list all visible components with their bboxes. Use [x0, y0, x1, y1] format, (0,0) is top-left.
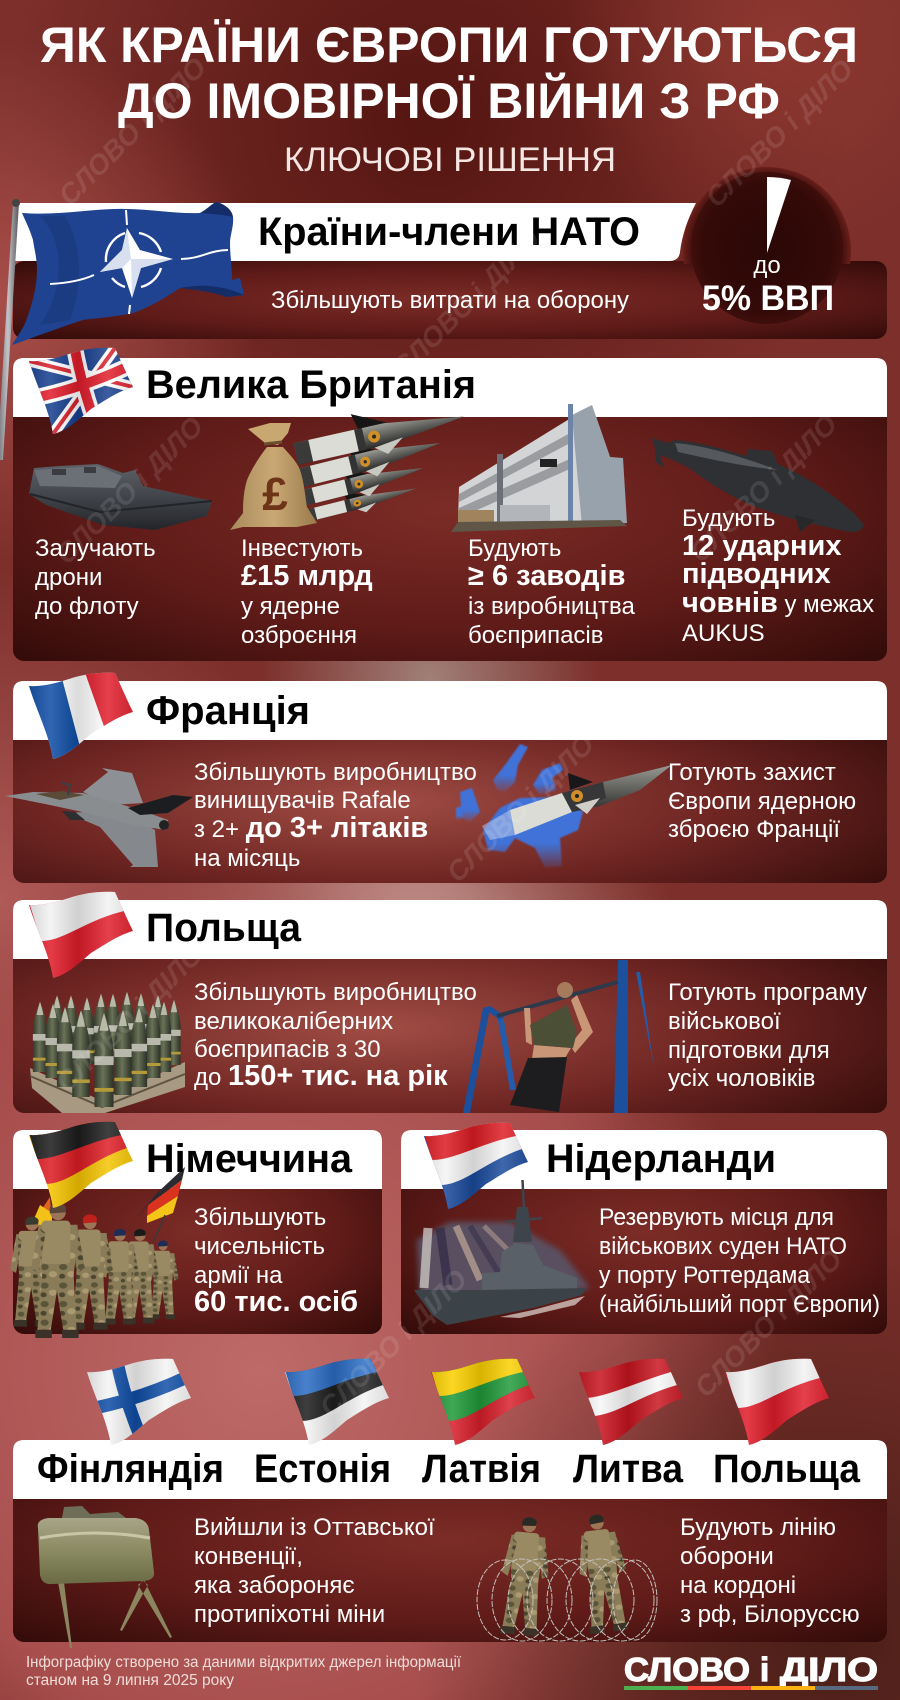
panel: Baltic and eastern states — [13, 1440, 887, 1642]
text: Rafale production: на місяць — [194, 845, 300, 872]
icon: soldiers with barbed wire — [477, 1512, 657, 1641]
icon: Netherlands flag — [424, 1122, 528, 1209]
source note: Інфографіку створено за даними відкритих джерел інформації — [26, 1654, 462, 1671]
watermarks: СЛОВО і ДІЛО — [699, 53, 859, 213]
text: investment: Інвестують — [241, 535, 363, 562]
panel: NATO — [13, 203, 887, 339]
icon: Rafale fighter — [5, 768, 193, 867]
watermarks: СЛОВО і ДІЛО — [440, 728, 600, 888]
icon: Estonia flag — [285, 1358, 389, 1445]
text: ammunition production: до 150+ тис. на рік — [194, 1060, 448, 1092]
watermarks: СЛОВО і ДІЛО — [688, 1243, 848, 1403]
icon: naval drone — [29, 464, 212, 530]
icon: Finland flag — [87, 1358, 191, 1445]
watermarks: СЛОВО і ДІЛО — [683, 408, 843, 568]
text: Rafale production: з 2+ до 3+ літаків — [194, 812, 428, 844]
heading bar: Poland — [13, 900, 887, 959]
text: submarines: AUKUS — [682, 620, 765, 647]
watermarks: СЛОВО і ДІЛО — [52, 51, 212, 211]
text: defence line — [680, 1514, 860, 1628]
text: factories — [468, 535, 635, 649]
text: investment: у ядерне — [241, 593, 340, 620]
icon: money bag: £ — [262, 468, 288, 520]
text: ammunition production: боєприпасів з 30 — [194, 1036, 381, 1063]
text: ammunition production: великокаліберних — [194, 1008, 393, 1035]
icon: anti-personnel mine — [38, 1506, 172, 1648]
text: army size: армії на — [194, 1262, 283, 1289]
text: port reservation: (найбільший порт Європи) — [599, 1291, 880, 1318]
text: military training — [668, 979, 867, 1092]
heading bar: NATO — [13, 203, 696, 261]
heading: country names: Фінляндія — [37, 1447, 224, 1491]
watermarks: СЛОВО і ДІЛО — [49, 410, 209, 570]
text: military training: військової — [668, 1008, 781, 1035]
icon: Germany flag — [29, 1122, 133, 1208]
text: port reservation: Резервують місця для — [599, 1204, 834, 1231]
subtitle: КЛЮЧОВІ РІШЕННЯ — [284, 141, 616, 179]
text: Rafale production — [194, 759, 477, 872]
panel: Germany — [13, 1130, 382, 1334]
text: Ottawa convention: конвенції, — [194, 1543, 303, 1570]
icon: ammunition factory — [451, 404, 627, 532]
watermarks: СЛОВО і ДІЛО — [49, 938, 209, 1098]
icon: nuclear missile — [482, 765, 672, 840]
heading: country names — [37, 1447, 861, 1491]
text: ammunition production: Збільшують виробництво — [194, 979, 477, 1006]
text: nuclear protection: зброєю Франції — [668, 816, 840, 843]
logo: і — [760, 1651, 769, 1688]
icon: Poland flag small — [725, 1358, 829, 1445]
text: ammunition production — [194, 979, 477, 1092]
text: defence line: оборони — [680, 1543, 774, 1570]
icon: Poland flag — [29, 892, 133, 978]
text: defence line: з рф, Білоруссю — [680, 1601, 860, 1628]
heading: Germany: Німеччина — [146, 1137, 353, 1181]
text: factories: ≥ 6 заводів — [468, 560, 625, 592]
text: Ottawa convention — [194, 1514, 435, 1628]
text: nuclear protection: Європи ядерною — [668, 788, 856, 815]
logo: СЛОВО — [624, 1651, 750, 1688]
text: military training: підготовки для — [668, 1037, 830, 1064]
text: submarines: підводних — [682, 558, 831, 590]
text: nuclear protection — [668, 759, 856, 843]
watermarks — [49, 51, 859, 1423]
icon: warship in port — [414, 1180, 590, 1325]
icon: map of Europe — [456, 744, 583, 868]
heading: Netherlands: Нідерланди — [546, 1137, 776, 1181]
text: investment — [241, 535, 373, 649]
text: defence line: Будують лінію — [680, 1514, 836, 1541]
text: Ottawa convention: Вийшли із Оттавської — [194, 1514, 435, 1541]
source note: станом на 9 липня 2025 року — [26, 1672, 234, 1689]
icon: man on pull-up bar — [463, 960, 654, 1113]
heading: Poland: Польща — [146, 906, 302, 950]
text: factories: із виробництва — [468, 593, 635, 620]
text: Rafale production: винищувачів Rafale — [194, 787, 411, 814]
chart: 5% of GDP dial: 5% ВВП — [702, 279, 834, 318]
text: investment: £15 млрд — [241, 560, 373, 592]
text: defence line: на кордоні — [680, 1572, 796, 1599]
text: factories: боєприпасів — [468, 622, 604, 649]
panel: Great Britain — [13, 358, 887, 661]
text: drones: до флоту — [35, 593, 139, 620]
text: drones — [35, 535, 156, 620]
text: port reservation: військових суден НАТО — [599, 1233, 847, 1260]
icon: Latvia flag — [579, 1358, 683, 1445]
heading: country names: Литва — [573, 1447, 684, 1491]
text: army size: чисельність — [194, 1233, 325, 1260]
logo — [624, 1651, 878, 1690]
heading: France: Франція — [146, 689, 310, 733]
text: Ottawa convention: яка забороняє — [194, 1572, 355, 1599]
text: submarines — [682, 505, 874, 647]
watermarks: СЛОВО і ДІЛО — [313, 1263, 473, 1423]
text: submarines: човнів у межах — [682, 587, 874, 619]
text: Rafale production: Збільшують виробництво — [194, 759, 477, 786]
watermarks: СЛОВО і ДІЛО — [386, 223, 546, 383]
heading: country names: Естонія — [254, 1447, 391, 1491]
heading bar: France — [13, 681, 887, 740]
panel: Netherlands — [401, 1130, 887, 1334]
text: port reservation: у порту Роттердама — [599, 1262, 811, 1289]
heading bar: Germany — [13, 1130, 382, 1189]
text: army size: Збільшують — [194, 1204, 326, 1231]
heading: Great Britain: Велика Британія — [146, 363, 476, 407]
chart: 5% of GDP dial — [683, 167, 851, 335]
heading: country names: Польща — [713, 1447, 861, 1491]
text: military training: усіх чоловіків — [668, 1065, 815, 1092]
icon: France flag — [29, 672, 133, 759]
text: drones: дрони — [35, 564, 102, 591]
heading bar: countries — [13, 1440, 887, 1499]
icon: submarine — [652, 438, 864, 532]
icon: artillery shells on a pallet — [30, 992, 185, 1113]
icon: NATO flag on a pole — [0, 199, 244, 460]
text: nuclear protection: Готують захист — [668, 759, 836, 786]
heading bar: Netherlands — [401, 1130, 887, 1189]
title: ЯК КРАЇНИ ЄВРОПИ ГОТУЮТЬСЯ — [40, 17, 858, 73]
text: Ottawa convention: протипіхотні міни — [194, 1601, 385, 1628]
chart: 5% of GDP dial: до — [753, 252, 781, 279]
text: army size — [194, 1204, 358, 1318]
panel: France — [13, 681, 887, 883]
icon: UK flag — [29, 348, 133, 434]
title — [40, 17, 858, 129]
text: submarines: Будують — [682, 505, 775, 532]
text: defence spending: Збільшують витрати на оборону — [271, 287, 629, 314]
icon: money bag — [230, 423, 317, 530]
text: drones: Залучають — [35, 535, 156, 562]
text: factories: Будують — [468, 535, 561, 562]
heading: NATO members: Країни-члени НАТО — [258, 210, 640, 254]
heading: country names: Латвія — [422, 1447, 541, 1491]
panel: Poland — [13, 900, 887, 1113]
text: army size: 60 тис. осіб — [194, 1286, 358, 1318]
text: port reservation — [599, 1204, 880, 1318]
text: submarines: 12 ударних — [682, 530, 841, 562]
title: ДО ІМОВІРНОЇ ВІЙНИ З РФ — [118, 72, 780, 129]
source note — [26, 1654, 462, 1689]
text: military training: Готують програму — [668, 979, 867, 1006]
text: investment: озброєння — [241, 622, 357, 649]
icon: Lithuania flag — [431, 1358, 535, 1445]
icon: marching soldiers — [10, 1167, 185, 1338]
heading bar: Great Britain — [13, 358, 887, 417]
icon: missiles — [290, 390, 468, 527]
logo: ДІЛО — [780, 1651, 878, 1688]
